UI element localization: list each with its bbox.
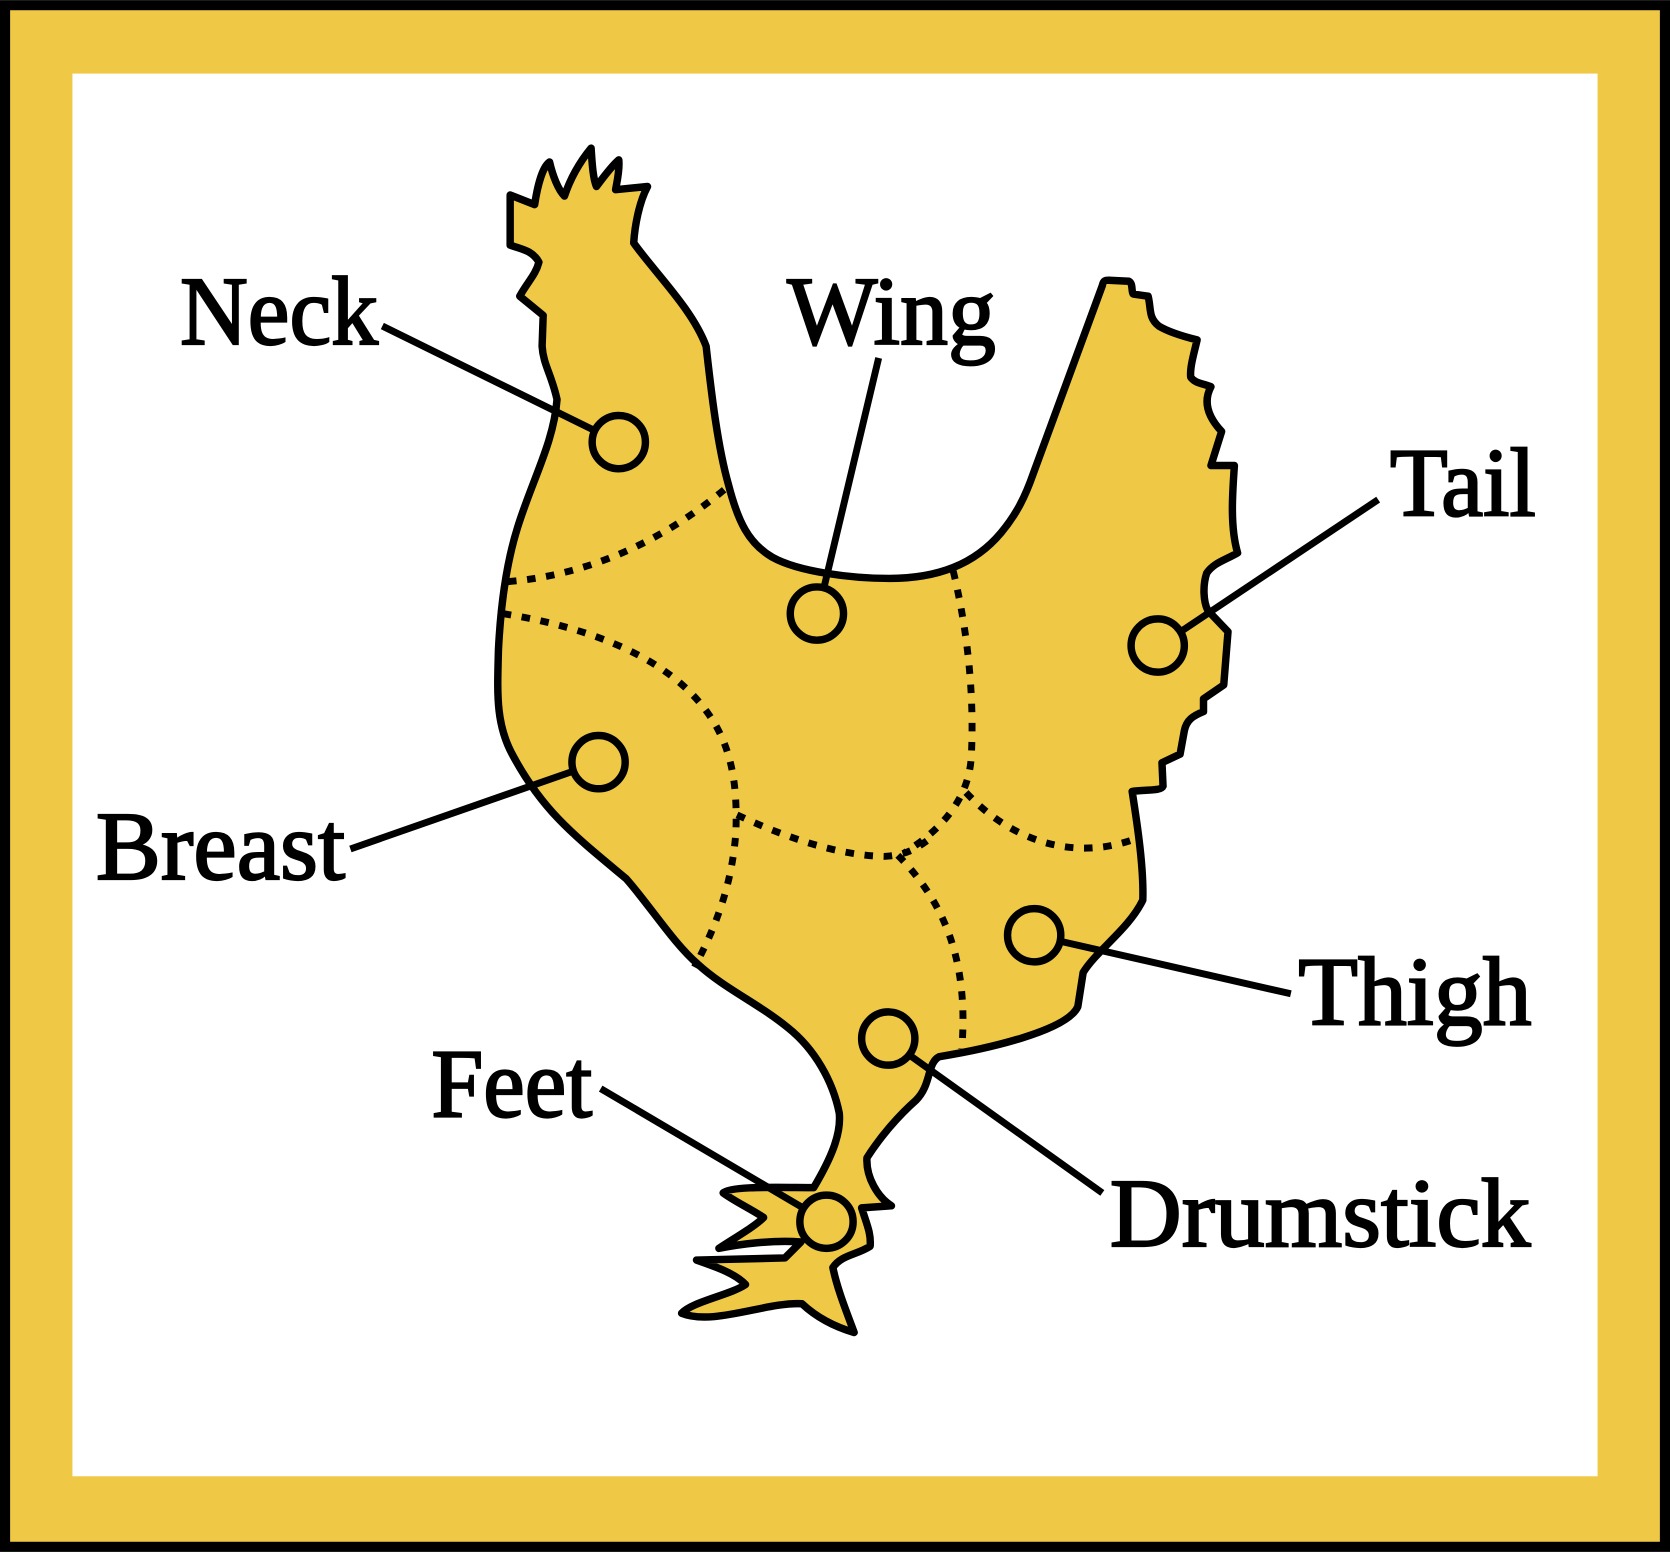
marker: tail [1131,619,1184,672]
label: Drumstick: Drumstick [1110,1160,1530,1268]
label: Tail: Tail [1390,430,1536,538]
leader: breast [350,771,573,849]
leader: neck [382,326,594,430]
cut line: tail bottom [966,793,1140,848]
leader: feet [601,1089,803,1208]
marker: breast [572,736,625,789]
leader: wing [824,358,879,586]
dotted cut lines [503,488,1140,1049]
label: Breast: Breast [96,793,345,901]
chicken silhouette [498,148,1238,1332]
cut line: thigh left [898,855,963,1049]
cut line: breast top [503,614,736,967]
label: Thigh: Thigh [1298,939,1532,1047]
marker: thigh [1008,909,1061,962]
label: Feet: Feet [431,1030,592,1138]
leader: drumstick [912,1057,1102,1193]
label: Wing: Wing [787,258,996,366]
marker: feet [800,1195,853,1248]
marker: neck [592,415,645,469]
leader lines [350,326,1378,1208]
marker: wing [790,587,844,640]
marker: drumstick [862,1012,915,1065]
marker circles [572,415,1184,1248]
leader: tail [1182,500,1378,631]
label: Neck: Neck [180,258,378,366]
leader: thigh [1062,942,1291,994]
cut line: wing bottom [737,815,929,856]
cut line: wing right [905,571,972,852]
cut line: neck [508,488,726,582]
